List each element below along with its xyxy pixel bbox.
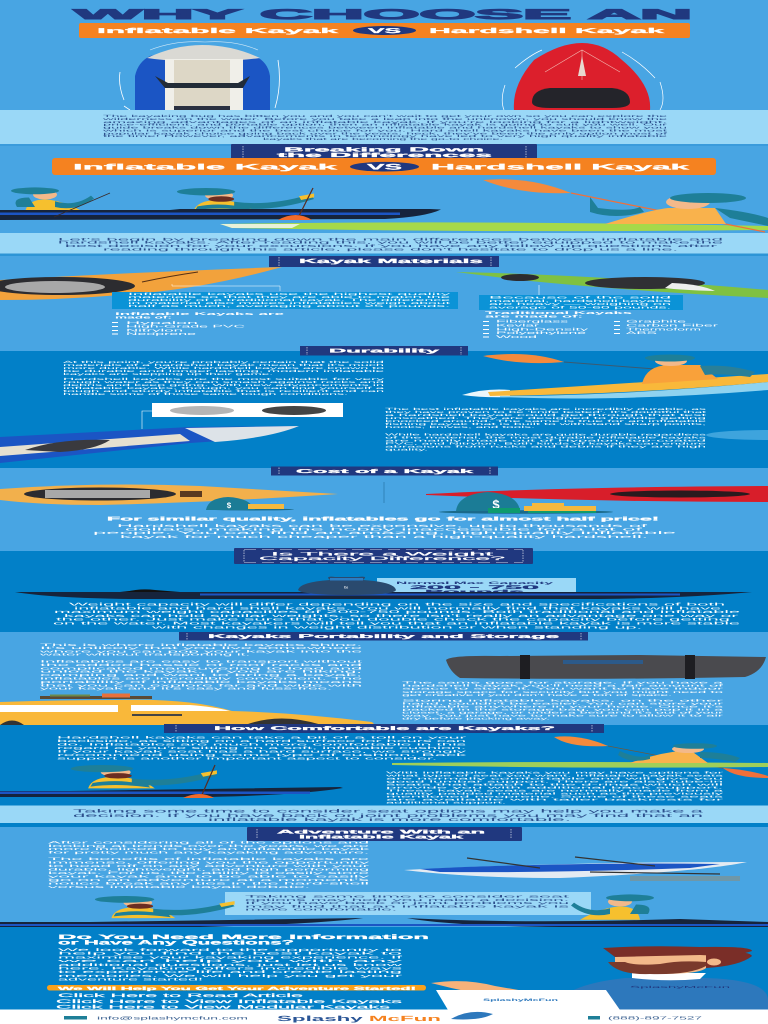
adventure text: durable, lightweight, and high performing: [48, 868, 370, 872]
adventure text: immense, offering you the opportunity: [48, 860, 371, 864]
icon: kettlebell weight: lbs: [344, 586, 348, 590]
portability text right: closet, a garage, or under a bed and it's out of your: [402, 710, 723, 714]
adventure text: kayak. For us, the ability to easily store: [48, 871, 370, 875]
durability text right: of the material, the most durable inflatable kayaks: [385, 436, 708, 440]
heading: kayak materials: [269, 256, 499, 267]
heading: breaking down the differences: Breaking Down: [284, 146, 485, 154]
illustration: man with laptop: SplashyMcFun: [483, 998, 558, 1002]
list: hardshell materials: Kevlar: [496, 324, 542, 328]
weight paragraph: Weight capacity will differ depending on the size and specifications of both: [69, 602, 725, 606]
illustration: paddler on green kayak: [220, 179, 768, 232]
contact paragraph: [58, 947, 407, 982]
weight paragraph: [53, 602, 744, 629]
weight paragraph: maximum weight capacities of 200-750 pounds. Both traditional and inflatable: [54, 609, 744, 614]
illustration: paddler on green kayak right: [392, 736, 768, 778]
list: inflatable materials: Hypalon: [126, 321, 198, 325]
list: hardshell materials: Traditional Kayaks: [485, 311, 632, 315]
illustration: yellow car with roof luggage: [0, 694, 375, 725]
illustration: blue inflatable kayak diagonal: [0, 426, 299, 463]
intro band: which is superior and the best choice for you. Hard shell kayaks have been the most: [103, 128, 668, 132]
capacity box: 200 - 750: [410, 585, 540, 591]
heading: breaking down the differences: [231, 144, 537, 161]
durability text right: a hardshell kayak could get through that test: [385, 413, 707, 417]
adventure text: to head off on any adventure with your: [48, 864, 374, 868]
portability text right: hand, couldn't be easier. You can store your: [402, 702, 723, 706]
portability text left: the added hassle of roof racks and: [40, 663, 363, 667]
list: hardshell materials: Graphite: [626, 320, 686, 324]
water ripple: [706, 430, 768, 440]
callout: hardshell materials: are heavy — weighing on: [489, 302, 672, 306]
durability text right: knocked around. The same is true for an inflatable: [385, 419, 707, 423]
durability text left: handle some of those same tough conditions.: [63, 392, 349, 396]
list: inflatable materials: High-Grade PVC: [126, 325, 246, 329]
heading: adventure: Inflatable Kayak: [299, 834, 463, 840]
portability text right: Storing inflatable kayaks, on the other: [402, 698, 723, 702]
comfort text right: additional support.: [386, 800, 507, 804]
list: inflatable materials: [112, 312, 284, 336]
orange call to action: We Will Help You Get Your Adventure Started!: [58, 986, 418, 991]
intro band: the time! However, advancements in technology have led to very high quality inflatable: [103, 134, 668, 138]
capacity box: Pounds: [425, 589, 527, 594]
comfort text left: [57, 736, 471, 760]
comfort text right: are normally comfortable and will give you: [386, 776, 725, 780]
contact heading: or Have Any Questions?: [58, 939, 294, 946]
list: hardshell materials: Polyethylene: [496, 331, 586, 335]
heading: durability: [300, 346, 468, 356]
hardshell kayak top view: [502, 43, 663, 110]
contact paragraph: help you find the best kayak to: [58, 951, 402, 956]
footer phone: (888)-897-7527: [608, 1016, 703, 1020]
portability text left: [40, 643, 364, 691]
icon: large money bag: [439, 492, 613, 514]
comfort text right: seats that attach to the d-rings which will: [386, 782, 725, 786]
durability text left: rough water as they can smash against rocks and: [63, 380, 385, 384]
cost text: [93, 516, 681, 539]
adventure text: The benefits of inflatable kayaks are: [48, 857, 370, 861]
portability text right: hardshell kayak you'll need a fair amount of: [402, 684, 724, 688]
heading: cost of a kayak: [271, 466, 498, 476]
portability text left: your kayak and it's easy and fuss-free.: [40, 687, 332, 691]
durability text left: inflatable kayaks, though, you can find yourself a: [63, 386, 385, 390]
icon: small money bag: $: [227, 501, 232, 510]
comfort text left: do. Inflatables are much more comfortable in this: [57, 742, 468, 746]
durability text left: tough and sturdy inflatable that is resilient and can: [63, 389, 385, 393]
comfort text right: These kayak seats are normally made from a: [386, 788, 725, 792]
callout: inflatable materials: [112, 292, 458, 309]
portability text left: unload the kayak. If you are hiking,: [40, 670, 362, 674]
durability text left: more durable. While hardshell kayaks are known to: [63, 366, 385, 370]
capacity box: Normal Max Capacity: [396, 581, 554, 585]
links: Click Here to Read Article: [58, 993, 304, 999]
durability text left: kayaks are stepping up their game.: [63, 372, 274, 376]
list: hardshell materials: Wood: [496, 335, 537, 339]
weight paragraph: inflatable and hard shell kayaks. You will normally find that kayaks will have: [74, 605, 725, 610]
callout: inflatable materials: materials so that they are able to match the: [128, 295, 451, 299]
list: inflatable materials: made of:: [115, 316, 172, 320]
contact paragraph: We look forward to the opportunity to: [58, 947, 402, 952]
portability text left: where you can pop your kayak into the: [40, 649, 363, 653]
contact heading: [58, 934, 429, 946]
banner: inflatable vs hardshell second: VS: [367, 162, 404, 172]
illustration: paddlers bottom kayaks: [0, 894, 768, 927]
inflatable kayak top view: [120, 42, 279, 110]
pale callout box: If you have back or joint problems you: [245, 901, 570, 905]
portability text right: get creative if you don't have a ton of space.: [402, 693, 673, 697]
illustration: paddlers on blue kayak: [0, 187, 441, 220]
pale callout box: options may help you make a decision.: [245, 898, 569, 902]
list: hardshell materials: are made of:: [485, 314, 583, 318]
durability text left: be durable and longer lasting, modern inflatable: [63, 369, 385, 373]
icon: email: [64, 1016, 87, 1020]
list: inflatable materials: Inflatable Kayaks are: [115, 312, 284, 316]
portability text left: water without transporting it.: [40, 653, 250, 657]
comfort text left: recommend using some type of cushion. Back: [57, 753, 468, 757]
durability text left: debris and keep going. With new advancements in: [63, 383, 385, 387]
cost text: people. You can find an amazing, high-quality inflatable: [93, 530, 681, 535]
cost text: Hardshell kayaks can be expensive, up to thousands of: [117, 523, 652, 528]
durability text left: Hardshell kayaks are the most suitable for very: [63, 377, 386, 381]
pale band: let's begin text: best decision for your excursions. If you have any follow up questions after: [65, 244, 721, 248]
adventure text: After considering all of the options and: [48, 840, 370, 844]
weight paragraph: with changes in weight distribution or when standing up.: [152, 624, 642, 629]
pale callout box: more comfortable.: [245, 908, 397, 912]
callout: inflatable materials: Inflatable kayaks use the highest quality: [128, 292, 452, 296]
portability text right: dry before packing away.: [402, 716, 551, 720]
cost text: kayak for much cheaper than a high-quality hardshell.: [120, 534, 648, 539]
durability text right: While hardshell kayaks are quite durable regardless: [385, 432, 708, 436]
banner: inflatable vs hardshell: [79, 23, 690, 38]
durability text right: [385, 407, 708, 452]
pale band: seat options: decision. If you have back or joint problems you may find that an: [73, 813, 704, 819]
heading: weight capacity: Is There a Weight: [271, 552, 496, 558]
footer: [0, 1010, 768, 1024]
callout: hardshell materials: [479, 295, 683, 310]
intro band: popular kayak choice going back over the years; heck, they've been the only option most of: [103, 131, 668, 135]
adventure text: more inclined to buy an inflatable kayak: [48, 847, 371, 851]
pale callout box: [225, 892, 591, 915]
pale band: seat options: inflatable kayak is more comfortable.: [208, 817, 571, 823]
icon: whale: [451, 1012, 493, 1019]
footer email: info@splashymcfun.com: [97, 1016, 248, 1020]
portability text right: The same goes for storage. If you have a: [402, 680, 725, 684]
illustration: long kayak: [15, 589, 752, 599]
icon: kettlebell weight: [298, 577, 396, 595]
callout: hardshell materials: average of 50-60 pounds.: [489, 306, 671, 310]
durability text right: they have proven to be 'knife tested'. It's doubtful that: [385, 410, 707, 414]
heading: durability: Durability: [329, 348, 443, 354]
contact paragraph: additional questions, just let us know: [58, 962, 403, 967]
banner: inflatable vs hardshell second: Hardshell Kayak: [431, 162, 691, 172]
illustration: paddler on blue kayak left: [0, 765, 343, 798]
durability text left: [63, 360, 386, 396]
durability text left: At this point, you're probably certain that the solid: [63, 360, 385, 364]
heading: how comfortable: How Comfortable are Kayaks?: [214, 726, 555, 732]
heading: cost of a kayak: Cost of a Kayak: [296, 469, 477, 475]
durability text right: hooks, knives, and tools.: [385, 425, 536, 429]
comfort text left: support is another important aspect to consider.: [57, 756, 438, 760]
illustration: green kayak: [456, 272, 768, 298]
list: hardshell materials: Carbon Fiber: [626, 324, 721, 328]
comfort text right: With inflatable kayaks you may have options for: [386, 770, 723, 774]
portability text right: inflatable anywhere in your home. Once it's: [402, 704, 725, 708]
contact heading: Do You Need More Information: [58, 934, 429, 941]
list: inflatable materials: Neoprene: [126, 332, 196, 336]
footer logo: Splashy McFun: [277, 1014, 442, 1023]
callout: hardshell materials: material, hardshell kayaks: [489, 299, 672, 303]
comfort text right: mentioned neoprene. Some of these seats: [386, 794, 726, 798]
list: hardshell materials: Fiberglass: [496, 320, 568, 324]
list: hardshell materials: [483, 311, 721, 339]
portability text right: packed in the storage bag, you can pop it in a: [402, 708, 724, 712]
weight paragraph: on the water. Most kayakers will tell you that an inflatable kayak is more stable: [53, 620, 744, 626]
links: [56, 993, 404, 1010]
weight paragraph: the other. Just make sure that you double check the capacity before getting: [56, 617, 730, 622]
heading: weight capacity: Capacity Difference?: [259, 556, 506, 562]
illustration: orange kayak side: [0, 485, 338, 505]
pale band: let's begin text: reading through this article, please don't hesitate to drop us a line.: [103, 247, 678, 251]
banner: inflatable vs hardshell second: [52, 158, 716, 175]
comfort text right: what type of seat you want. Inflatable kayak seats: [386, 774, 726, 778]
heading: portability: [179, 632, 588, 640]
portability text left: This is where inflatable kayaks shine.: [40, 643, 362, 647]
comfort text right: quality padded material such as the previously: [386, 792, 726, 796]
list: hardshell materials: High-Density: [496, 327, 588, 331]
pale band: seat options: [0, 806, 768, 823]
callout: inflatable materials: durability of a traditional kayak. The difference: [128, 298, 451, 302]
illustration: paddler on yellow kayak: [462, 354, 768, 398]
vertical divider: [383, 482, 385, 503]
heading: adventure: Adventure With an: [277, 830, 485, 836]
banner: inflatable vs hardshell second: Inflatable Kayak: [73, 162, 339, 172]
adventure text: [48, 840, 374, 889]
contact paragraph: to experience life and create lasting: [58, 969, 402, 974]
adventure text: go on an adventure at a moment's: [48, 878, 371, 882]
adventure text: notice break any ties in the hard-shell: [48, 882, 370, 886]
list: hardshell materials: ABS: [626, 331, 659, 335]
illustration: man with laptop: [431, 946, 768, 1010]
portability text left: that you can explore far and wide with: [40, 683, 363, 687]
portability text left: complicated maneuvering to load and: [40, 666, 363, 670]
intro band: price-efficient, and portable option, then an inflatable kayak is going to suit you well. Our: [103, 123, 667, 127]
illustration: red kayak side: [426, 486, 768, 502]
illustration: storage bag: [446, 655, 766, 679]
comfort text right: provide you with additional back support.: [386, 786, 724, 790]
banner: inflatable vs hardshell: Inflatable Kayak: [97, 27, 338, 35]
heading: how comfortable: [164, 724, 604, 733]
cost text: For similar quality, inflatables go for almost half price!: [107, 516, 660, 522]
comfort text left: regard as you're sitting on a soft, inflatable cushion.: [57, 746, 466, 750]
durability text right: quality.: [385, 448, 429, 452]
intro band: wilderness on the water. Before you take a leap into the unknown, you should know the: [103, 117, 668, 121]
portability text left: camping and want to bring a kayak,: [40, 673, 362, 677]
adventure text: versus inflatable kayak debate.: [48, 885, 310, 889]
pale band: let's begin text: hardshell kayaks. After reading this, you will be better equipped to make the: [58, 241, 723, 245]
icon: phone: [588, 1016, 600, 1020]
contact paragraph: maximise your kayaking experience. If: [58, 954, 407, 959]
comfort text right: good lumbar support. There are also tube-in: [386, 780, 725, 784]
durability text right: fishing kayak that is built to withstand sharp points,: [385, 422, 707, 426]
illustration: orange kayak: [0, 267, 282, 300]
pale callout box: Taking some time to consider seat: [245, 894, 569, 898]
portability text right: space to store it. You want to have indoor: [402, 687, 723, 691]
portability text left: It's unlikely that you live somewhere: [40, 646, 363, 650]
heading: weight capacity: [234, 548, 533, 564]
illustration: tandem inflatable kayak: [404, 857, 747, 881]
comfort text right: are available with taller backrests for: [386, 798, 723, 802]
portability text left: portability of inflatable kayaks means: [40, 680, 364, 684]
durability text right: PVC, and Nitrylon. Both kinds of kayaks can endure: [385, 442, 707, 446]
comfort text right: [386, 770, 726, 804]
list: hardshell materials: Thermoform: [626, 327, 701, 331]
cost text: dollars, making the hobby inaccessible for a lot of: [125, 526, 647, 532]
portability text right: storage space for security but you might need to: [402, 690, 724, 694]
contact paragraph: we can help you with any: [58, 958, 402, 963]
intro band: amazing advantages of an inflatable kayak. If you're looking for a lightweight,: [103, 120, 668, 124]
heading: breaking down the differences: the Differences: [277, 152, 495, 159]
contact paragraph: memories. We will help you get your: [58, 973, 406, 978]
durability text right: abrasions from rocks and debris if they are high: [385, 444, 707, 448]
icon: small money bag: [206, 497, 294, 510]
comfort text left: If your kayak seat has a hard surface, we strongly: [57, 750, 468, 754]
heading: adventure: [247, 827, 522, 841]
portability text right: way. You just have to make sure to allow it to air: [402, 714, 723, 718]
banner: inflatable vs hardshell: VS: [368, 28, 402, 35]
links: Click Here to View Inflatable Kayaks: [56, 999, 404, 1005]
pale band: let's begin text: [0, 233, 768, 254]
portability text left: Inflatables are easy to transport without: [40, 660, 362, 664]
pale band: let's begin text: Let's begin by breaking down the main differences between inflatable and: [58, 237, 723, 241]
heading: portability: Kayaks Portability and Storage: [208, 634, 559, 640]
durability text left: materials of a hardshell kayak mean that it's much: [63, 363, 385, 367]
capacity box: [377, 578, 576, 595]
list: inflatable materials: Nitrylon: [126, 328, 183, 332]
intro band: [0, 110, 768, 144]
orange call to action: [47, 985, 426, 991]
pale band: seat options: Taking some time to consider seat options may help you make a: [73, 808, 705, 814]
intro band: guide breaks down the differences between inflatable and hardshell kayaks to show you: [103, 126, 668, 130]
banner: inflatable vs hardshell: Hardshell Kayak: [429, 27, 664, 35]
comfort text left: backside, as sitting on a hard surface for hours can: [57, 739, 467, 743]
icon: large money bag: $: [492, 497, 500, 512]
weight paragraph: kayaks can hold similar weights, so there isn't really an advantage one way or: [64, 613, 741, 618]
links: Click Here to View Modular Kayaks: [56, 1004, 392, 1010]
callout: hardshell materials: Because of the solid: [489, 296, 672, 300]
callout: inflatable materials: in material also makes inflatables weigh about: [128, 301, 451, 305]
callout: inflatable materials: half as much, averaging about 25 pounds.: [128, 304, 451, 308]
adventure text: your kayak and to be able to easily: [48, 874, 371, 878]
adventure text: looking at trends over the years, we are: [48, 844, 370, 848]
durability text right: The best inflatable kayaks are incredibly durable, as: [385, 407, 708, 411]
comfort text left: Hardshell kayaks can take a bit of a toll on your: [57, 736, 471, 740]
heading: kayak materials: Kayak Materials: [299, 258, 486, 265]
pale callout box: may find that an inflatable kayak is: [245, 904, 571, 908]
adventure text: for pretty much any kayaking adventure.: [48, 850, 369, 854]
intro band: The kayaking bug has bitten you and you can't wait to get your own so you can explore the: [103, 114, 668, 118]
portability text right: [402, 680, 725, 720]
durability text right: are mainly made out of Hypalon, top-coated: [385, 438, 707, 442]
title: WHY CHOOSE AN: [74, 6, 692, 22]
contact paragraph: here. Kayaking offers incredible ways: [58, 966, 402, 970]
intro band: kayaks that are becoming the go-to choice.: [263, 137, 504, 141]
contact paragraph: adventure started!: [58, 977, 203, 982]
portability text left: inflatables are incredibly convenient. The: [40, 676, 363, 680]
swatches box: [142, 403, 343, 429]
illustration: man with laptop: SplashyMcFun: [630, 985, 732, 989]
durability text right: unscathed. They are designed to handle getting: [385, 416, 707, 420]
